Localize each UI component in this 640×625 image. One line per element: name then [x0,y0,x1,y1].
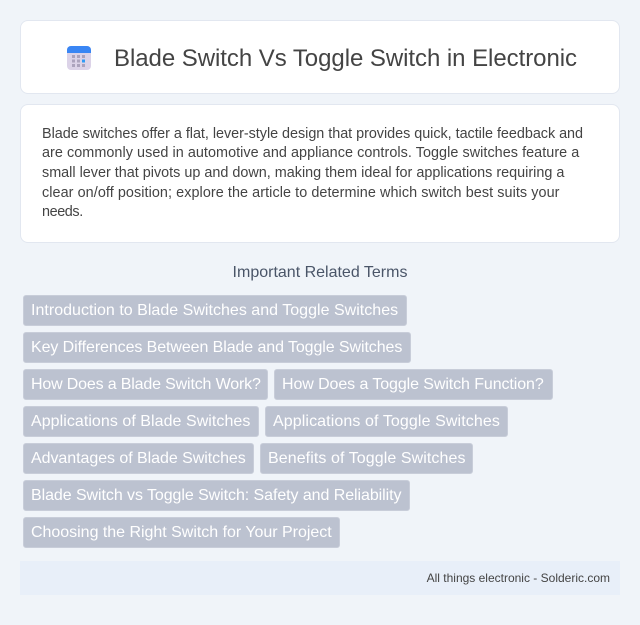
tag: Blade Switch vs Toggle Switch: Safety and Reliability [31,487,401,504]
tag: Applications of Toggle Switches [273,413,500,430]
section heading: Important Related Terms [233,264,407,281]
intro paragraph: clear on/off position; explore the article to determine which switch best suits your [42,185,560,201]
intro text card [20,104,620,243]
tag list [23,295,553,548]
intro paragraph: needs. [42,204,83,220]
tag [23,406,259,437]
intro paragraph [42,126,583,220]
tag [23,480,410,511]
tag: How Does a Blade Switch Work? [31,376,261,393]
tag: Advantages of Blade Switches [31,450,246,467]
tag [23,517,340,548]
icon: calendar [67,46,91,70]
tag [274,369,553,400]
tag [23,443,254,474]
footer text: All things electronic - Solderic.com [427,571,610,585]
title: Blade Switch Vs Toggle Switch in Electronic [114,45,577,72]
tag: How Does a Toggle Switch Function? [282,376,544,393]
tag [23,295,407,326]
tag: Benefits of Toggle Switches [268,450,466,467]
tag [265,406,508,437]
tag [23,332,411,363]
intro paragraph: Blade switches offer a flat, lever-style design that provides quick, tactile feedback and [42,126,583,142]
tag: Key Differences Between Blade and Toggle Switches [31,339,402,356]
tag: Choosing the Right Switch for Your Project [31,524,332,541]
intro paragraph: are commonly used in automotive and appliance controls. Toggle switches feature a [42,145,579,161]
tag: Introduction to Blade Switches and Toggle Switches [31,302,398,319]
tag [23,369,268,400]
tag [260,443,473,474]
tag: Applications of Blade Switches [31,413,250,430]
title card [20,20,620,94]
footer bar [20,561,620,595]
intro paragraph: small lever that pivots up and down, making them ideal for applications requiring a [42,165,564,181]
